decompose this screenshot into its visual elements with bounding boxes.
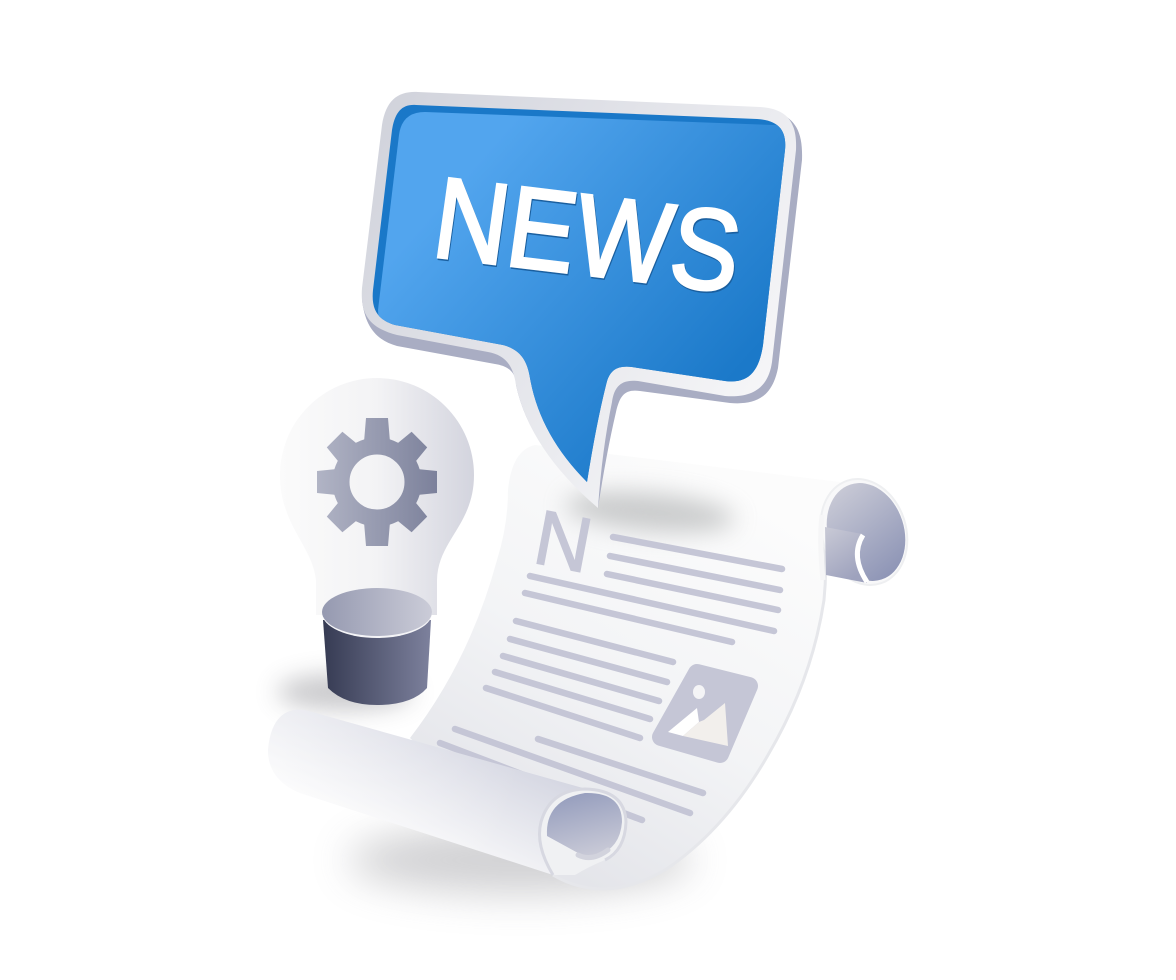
light bulb [280,378,474,705]
image placeholder icon [661,673,749,754]
bubble rim [362,92,796,508]
right paper roll [807,468,921,596]
bubble extrusion [362,109,802,508]
icon: gear [317,418,437,546]
cup base [322,588,432,705]
shadow: under bottom roll [348,826,692,894]
shadow: under cup [277,674,413,710]
illustration: news scroll, speech bubble and light bulb [268,92,908,912]
paper headline letter: N [528,494,599,590]
heading: NEWS: NEWS [427,154,748,317]
text lines [440,537,782,820]
bottom paper roll [268,710,626,875]
shadow: bubble tip on paper [564,486,736,538]
bubble face [373,105,785,482]
paper scroll sheet [410,445,860,889]
speech bubble [362,92,802,508]
heading: NEWS shadow: NEWS [427,155,749,319]
